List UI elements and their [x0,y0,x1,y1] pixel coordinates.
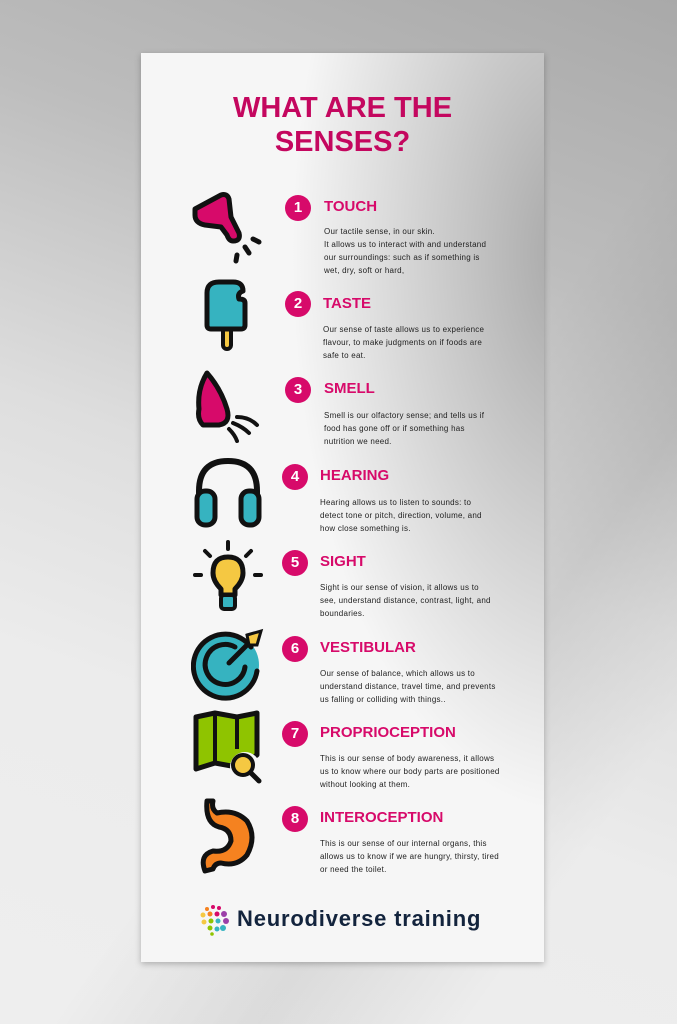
heading: vestibular: VESTIBULAR [320,639,416,656]
text: touch: Our tactile sense, in our skin. [324,227,435,236]
icon: light bulb [193,540,263,611]
icon: smell nose [196,370,260,443]
number 8 [282,806,308,832]
icon: touch hand [192,192,262,264]
text: taste: Our sense of taste allows us to experience flavour, to make judgments on if foods are safe to eat. [323,325,484,360]
heading: hearing: HEARING [320,467,389,484]
heading: proprioception: PROPRIOCEPTION [320,724,456,741]
heading: smell: SMELL [324,380,375,397]
number 4: 4 [291,468,299,485]
number 8: 8 [291,810,299,827]
number 1: 1 [294,199,302,216]
heading: sight: SIGHT [320,553,366,570]
text: vestibular: Our sense of balance, which allows us to understand distance, travel time, and prevents us falling or colliding with things.. [320,669,496,704]
text: interoception: This is our sense of our internal organs, this allows us to know if we are hungry, thirsty, tired or need the toilet. [320,839,499,874]
logo text: Neurodiverse training [237,906,481,931]
card [141,53,544,962]
logo icon: dots [200,905,229,936]
number 7: 7 [291,725,299,742]
number 3 [285,377,311,403]
number 2 [285,291,311,317]
heading: taste: TASTE [323,295,371,312]
text: smell: Smell is our olfactory sense; and tells us if food has gone off or if something has nutrition we need. [324,411,484,446]
icon: headphones [194,458,262,528]
title: WHAT ARE THE [233,92,452,124]
text: proprioception: This is our sense of body awareness, it allows us to know where our body parts are positioned without looking at them. [320,754,500,789]
number 6 [282,636,308,662]
number 1 [285,195,311,221]
title [233,92,452,158]
number 2: 2 [294,295,302,312]
number 5 [282,550,308,576]
title: SENSES? [275,126,410,158]
number 3: 3 [294,381,302,398]
number 7 [282,721,308,747]
heading: touch: TOUCH [324,198,377,215]
number 4 [282,464,308,490]
icon: stomach [200,798,254,874]
icon: map with magnifier [194,710,262,784]
number 5: 5 [291,554,299,571]
icon: taste ice lolly [204,280,248,351]
logo [200,905,481,936]
text: hearing: Hearing allows us to listen to sounds: to detect tone or pitch, direction, volume, and how close something is. [320,498,482,533]
text: sight: Sight is our sense of vision, it allows us to see, understand distance, contrast, light, and boundaries. [320,583,491,618]
number 6: 6 [291,640,299,657]
icon: target [191,628,264,701]
text: touch: It allows us to interact with and understand our surroundings: such as if something is wet, dry, soft or hard, [324,240,486,275]
heading: interoception: INTEROCEPTION [320,809,443,826]
